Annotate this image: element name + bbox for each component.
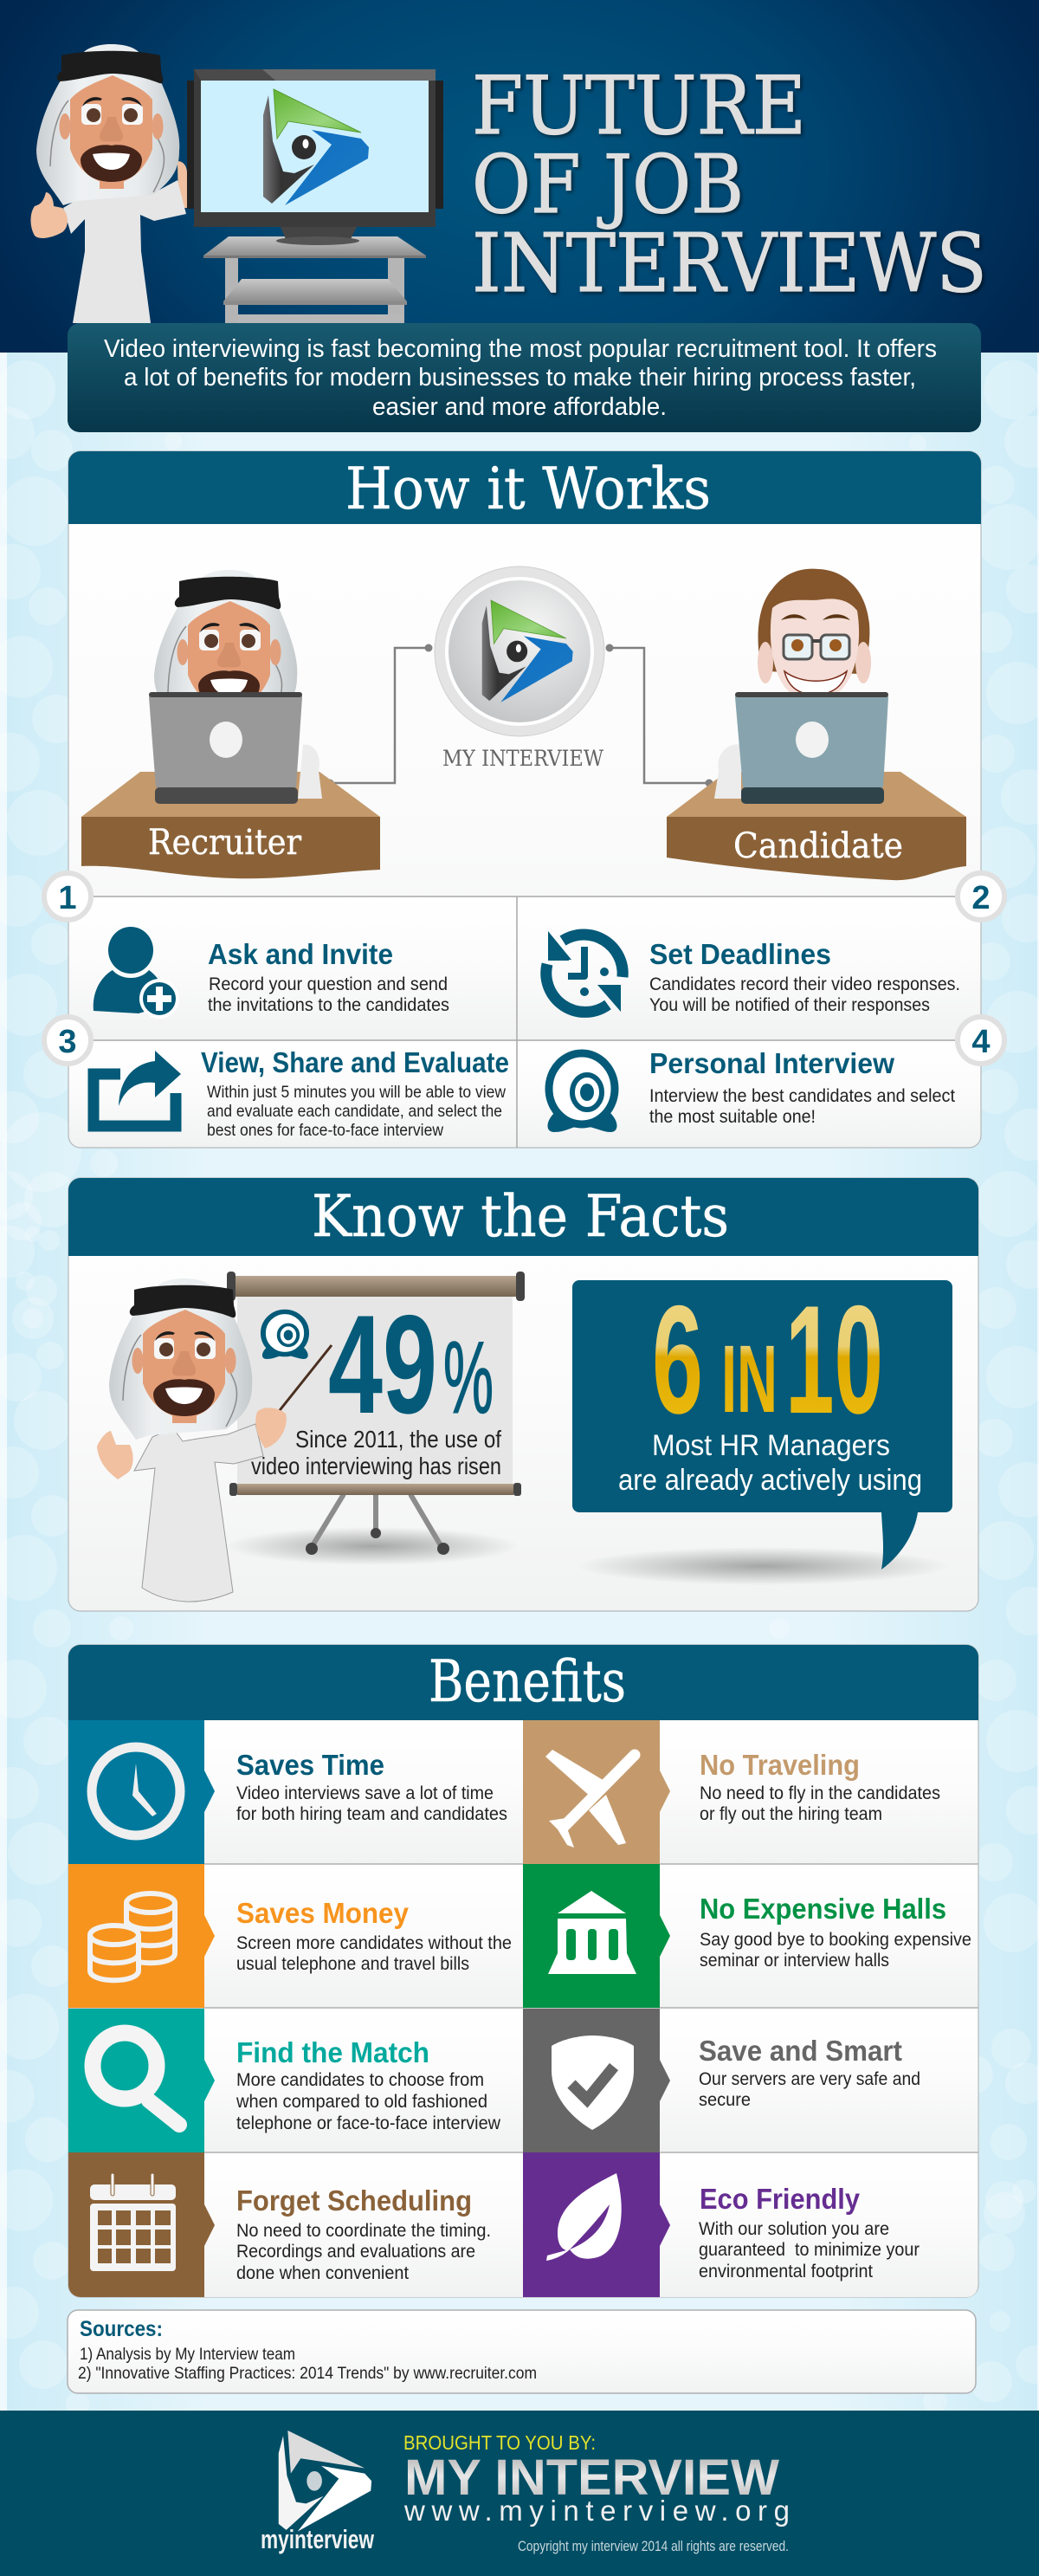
- benefit: find the match: when compared to old fashioned: [236, 2091, 487, 2112]
- sources box: 2) "Innovative Staffing Practices: 2014 Trends" by www.recruiter.com: [78, 2364, 537, 2383]
- icon: magnifying glass: [93, 2033, 179, 2125]
- intro text box: easier and more affordable.: [372, 393, 667, 421]
- step 4: personal interview: [547, 1047, 955, 1132]
- stat: 49 percent: 49: [328, 1286, 437, 1443]
- heading: know the facts: [68, 1178, 978, 1256]
- stat caption: Since 2011, the use of: [295, 1426, 501, 1453]
- sources box: 1) Analysis by My Interview team: [80, 2345, 295, 2364]
- number badge 1: 1: [58, 880, 77, 916]
- benefit: find the match: [68, 2009, 500, 2152]
- stat: 6 in 10: [652, 1273, 883, 1446]
- benefit: saves time: [68, 1720, 507, 1864]
- benefit: save and smart: Save and Smart: [699, 2035, 902, 2067]
- step 2: set deadlines: Set Deadlines: [649, 938, 831, 970]
- icon: clock with arrows: [546, 931, 623, 1012]
- stat caption: video interviewing has risen: [251, 1453, 501, 1479]
- speech bubble: 6 in 10: [572, 1273, 952, 1585]
- benefit: saves time: Saves Time: [236, 1749, 384, 1781]
- step 2: set deadlines: [546, 931, 960, 1015]
- benefit: eco friendly: Eco Friendly: [700, 2183, 861, 2215]
- benefit: no traveling: or fly out the hiring team: [700, 1803, 882, 1824]
- heading: how it works: [68, 451, 981, 524]
- benefit: no expensive halls: Say good bye to booking expensive: [700, 1929, 971, 1950]
- number badge 3: [44, 1017, 91, 1064]
- step 3: view share evaluate: [94, 1046, 509, 1140]
- copyright: Copyright my interview 2014 all rights are reserved.: [518, 2539, 789, 2554]
- brought to you by: BROUGHT TO YOU BY:: [403, 2431, 596, 2454]
- number badge 2: [958, 873, 1004, 920]
- stat: 49 percent: %: [443, 1321, 494, 1435]
- benefit: save and smart: [523, 2009, 920, 2152]
- number badge 4: [958, 1017, 1004, 1064]
- table: [203, 236, 426, 323]
- step 1: ask and invite: Ask and Invite: [208, 938, 393, 970]
- benefit: saves money: [68, 1864, 512, 2008]
- step 4: personal interview: Interview the best candidates and select: [649, 1085, 955, 1106]
- stat: 6 in 10: 10: [785, 1273, 883, 1446]
- benefit: save and smart: Our servers are very safe and: [699, 2068, 920, 2089]
- footer: [0, 2411, 1039, 2576]
- icon: leaf: [546, 2173, 622, 2261]
- sources box: Sources:: [80, 2317, 163, 2341]
- icon: calendar: [90, 2173, 176, 2271]
- benefit: save and smart: secure: [699, 2089, 751, 2110]
- website: www.myinterview.org: [403, 2495, 790, 2527]
- stat: 6 in 10: 6: [652, 1273, 703, 1446]
- character: presenter in header: [31, 44, 187, 323]
- footer logo: myinterview: [261, 2524, 375, 2554]
- benefit: eco friendly: environmental footprint: [699, 2261, 873, 2282]
- intro text box: Video interviewing is fast becoming the most popular recruitment tool. It offers: [104, 335, 937, 363]
- step 2: set deadlines: You will be notified of their responses: [649, 994, 930, 1015]
- icon: columned hall: [548, 1891, 636, 1974]
- number badge 3: 3: [58, 1024, 77, 1060]
- bubble caption: Most HR Managers: [652, 1429, 890, 1462]
- panel: benefits: [68, 1645, 978, 2297]
- number badge 4: 4: [971, 1024, 991, 1060]
- number badge 1: [44, 873, 91, 920]
- benefit: forget scheduling: Forget Scheduling: [236, 2184, 472, 2217]
- recruiter illustration: [81, 570, 380, 878]
- benefit: saves money: usual telephone and travel bills: [236, 1953, 469, 1974]
- monitor: [187, 69, 443, 245]
- benefit: forget scheduling: Recordings and evaluations are: [236, 2241, 475, 2262]
- benefit: no traveling: [523, 1720, 940, 1864]
- icon: shield with check: [552, 2036, 634, 2130]
- my interview logo badge: [435, 566, 604, 771]
- heading: benefits: Benefits: [429, 1648, 626, 1715]
- benefit: saves money: Saves Money: [236, 1897, 410, 1929]
- benefit: forget scheduling: done when convenient: [236, 2262, 409, 2283]
- icon: airplane: [545, 1750, 635, 1848]
- benefit: no expensive halls: No Expensive Halls: [700, 1893, 946, 1925]
- heading: know the facts: Know the Facts: [312, 1183, 729, 1250]
- candidate illustration: [667, 569, 966, 880]
- character: presenter with pointer: [97, 1278, 332, 1602]
- icon: coins: [90, 1893, 175, 1980]
- title: OF JOB: [472, 138, 744, 231]
- bubble caption: are already actively using: [618, 1464, 922, 1497]
- icon: webcam: [547, 1053, 616, 1132]
- step 1: ask and invite: the invitations to the candidates: [208, 994, 449, 1015]
- benefit: find the match: telephone or face-to-face interview: [236, 2113, 500, 2133]
- step 1: ask and invite: [94, 927, 449, 1019]
- title: INTERVIEWS: [472, 217, 987, 310]
- step 3: view share evaluate: and evaluate each candidate, and select the: [207, 1102, 502, 1121]
- icon: share: [94, 1051, 181, 1126]
- label: my interview: MY INTERVIEW: [442, 746, 603, 771]
- panel: how it works: [44, 451, 1004, 1148]
- heading: benefits: [68, 1645, 978, 1720]
- step 1: ask and invite: Record your question and send: [209, 974, 448, 994]
- illustration: monitor on table: [187, 69, 443, 323]
- stat caption: [251, 1426, 501, 1479]
- sources box: [68, 2310, 976, 2393]
- label: recruiter: Recruiter: [148, 823, 302, 863]
- benefit: eco friendly: With our solution you are: [699, 2218, 889, 2239]
- benefit: no expensive halls: [523, 1864, 971, 2008]
- title: FUTURE: [472, 59, 806, 152]
- benefit: forget scheduling: No need to coordinate the timing.: [236, 2220, 491, 2241]
- benefit: no traveling: No Traveling: [700, 1749, 860, 1781]
- step 4: personal interview: the most suitable one!: [649, 1106, 816, 1127]
- intro text box: [68, 323, 981, 432]
- benefit: no expensive halls: seminar or interview halls: [700, 1950, 889, 1971]
- benefit: find the match: Find the Match: [236, 2036, 429, 2068]
- benefit: forget scheduling: [68, 2152, 491, 2297]
- step 3: view share evaluate: View, Share and Evaluate: [201, 1046, 509, 1078]
- heading: how it works: How it Works: [345, 456, 711, 522]
- easel with 49 percent stat: [225, 1272, 525, 1565]
- step 3: view share evaluate: Within just 5 minutes you will be able to view: [207, 1083, 507, 1102]
- benefit: eco friendly: guaranteed to minimize your: [699, 2239, 920, 2260]
- bubble caption: [618, 1429, 922, 1497]
- icon: webcam: [262, 1311, 308, 1359]
- step grid: [44, 873, 1004, 1148]
- step 4: personal interview: Personal Interview: [649, 1047, 894, 1079]
- connector: recruiter to logo: [326, 644, 433, 786]
- footer logo: [261, 2430, 375, 2554]
- panel: know the facts: [68, 1178, 978, 1611]
- benefit: find the match: More candidates to choose from: [236, 2069, 484, 2090]
- connector: logo to candidate: [606, 644, 713, 786]
- benefit: saves money: Screen more candidates without the: [236, 1932, 512, 1953]
- step 2: set deadlines: Candidates record their video responses.: [649, 974, 960, 994]
- title: [472, 59, 987, 310]
- benefit: no traveling: No need to fly in the candidates: [700, 1783, 940, 1803]
- intro text box: a lot of benefits for modern businesses to make their hiring process faster,: [124, 364, 916, 392]
- stat: 6 in 10: IN: [721, 1326, 778, 1433]
- step 3: view share evaluate: best ones for face-to-face interview: [207, 1121, 444, 1140]
- label: candidate: Candidate: [733, 826, 903, 866]
- header band: [0, 0, 1039, 353]
- benefit: saves time: for both hiring team and candidates: [236, 1803, 507, 1824]
- number badge 2: 2: [971, 880, 991, 916]
- benefit: eco friendly: [523, 2152, 920, 2297]
- icon: person add: [94, 927, 179, 1019]
- brand name: MY INTERVIEW: [404, 2450, 779, 2506]
- logo on screen: [263, 89, 369, 205]
- benefit: saves time: Video interviews save a lot of time: [236, 1783, 494, 1803]
- icon: clock: [92, 1747, 180, 1835]
